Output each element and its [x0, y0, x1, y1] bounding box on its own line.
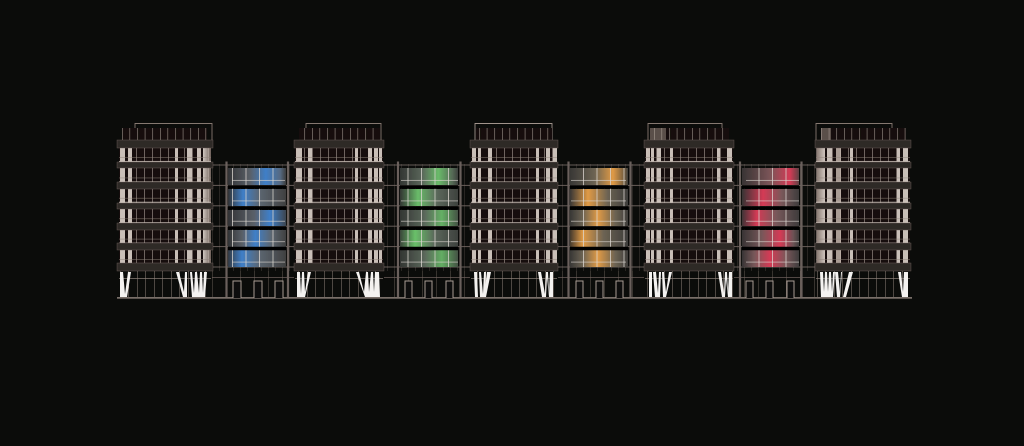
window light strips [646, 148, 732, 263]
tower 1 [117, 124, 213, 297]
base ground line [117, 297, 912, 298]
floor slabs [815, 140, 911, 271]
green glass panels [400, 168, 458, 267]
window light strips [120, 148, 211, 263]
floor slabs [294, 140, 384, 271]
elevation: full building row [117, 124, 912, 298]
link bay 1 with blue glass [212, 162, 294, 298]
floor slabs [644, 140, 734, 271]
columns and doors [740, 162, 802, 297]
orange glass panels [570, 168, 628, 267]
white V columns [649, 272, 732, 297]
window light strips [296, 148, 382, 263]
blue glass panels [228, 168, 286, 267]
white V columns [820, 272, 908, 297]
white V columns [297, 272, 380, 297]
white V columns [120, 272, 207, 297]
tower 2 [294, 124, 384, 297]
columns and doors [226, 162, 288, 297]
floor slabs [117, 140, 213, 271]
tower 5 [815, 124, 911, 297]
window light strips [472, 148, 557, 263]
columns and doors [398, 162, 460, 297]
window light strips [817, 148, 908, 263]
link bay 2 with green glass [384, 162, 470, 298]
white V columns [474, 272, 553, 297]
tower 3 [470, 124, 558, 297]
red glass panels [742, 168, 799, 267]
columns and doors [568, 162, 630, 297]
link bay 4 with red glass [734, 162, 815, 298]
link bay 3 with orange glass [558, 162, 644, 298]
tower 4 [644, 124, 734, 297]
floor slabs [470, 140, 558, 271]
